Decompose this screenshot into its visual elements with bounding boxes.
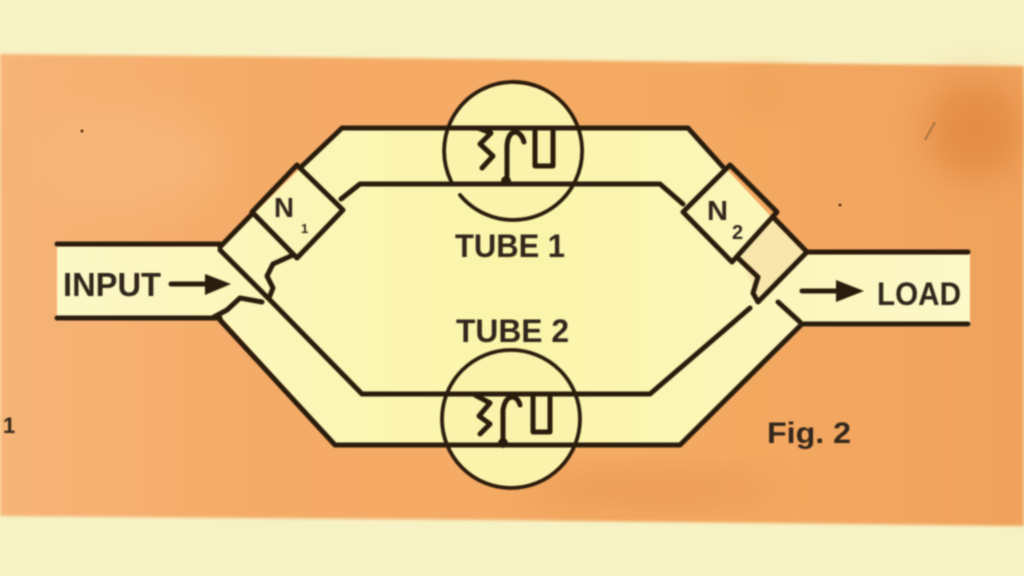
diagram linework <box>57 82 968 488</box>
load arrow <box>802 280 864 302</box>
N1 box <box>252 165 343 258</box>
label: tube 1: TUBE 1 <box>455 228 565 264</box>
N2 box <box>683 165 777 262</box>
load junction stub <box>738 252 807 302</box>
tube 2 electrodes <box>475 395 550 448</box>
label: N2 subscript: 2 <box>732 222 743 244</box>
lower arm inner wall <box>220 250 750 394</box>
tube 1 envelope <box>444 82 582 220</box>
upper arm outer wall <box>220 128 968 252</box>
input junction stub <box>212 298 262 318</box>
shaded section beside N2 <box>740 218 805 298</box>
label: tube 2: TUBE 2 <box>456 313 569 349</box>
waveguide network fill <box>57 83 970 487</box>
upper arm inner wall <box>341 184 683 204</box>
stray margin numeral: 1 <box>3 413 15 438</box>
input guide walls <box>57 244 220 318</box>
tube 2 envelope fill <box>443 351 579 487</box>
label: load: LOAD <box>877 276 961 312</box>
label: N1 subscript: 1 <box>301 221 308 236</box>
label: N2: N <box>707 195 728 226</box>
label: N1: N <box>274 192 294 223</box>
figure caption: Fig. 2 <box>767 417 851 450</box>
lower arm outer wall <box>220 320 968 445</box>
tube 1 envelope fill <box>445 83 581 219</box>
input arrow <box>171 274 231 295</box>
tube 1 electrodes <box>478 128 553 186</box>
tube 2 envelope <box>442 350 580 488</box>
diagram labels <box>3 192 961 450</box>
label: input: INPUT <box>63 266 161 303</box>
